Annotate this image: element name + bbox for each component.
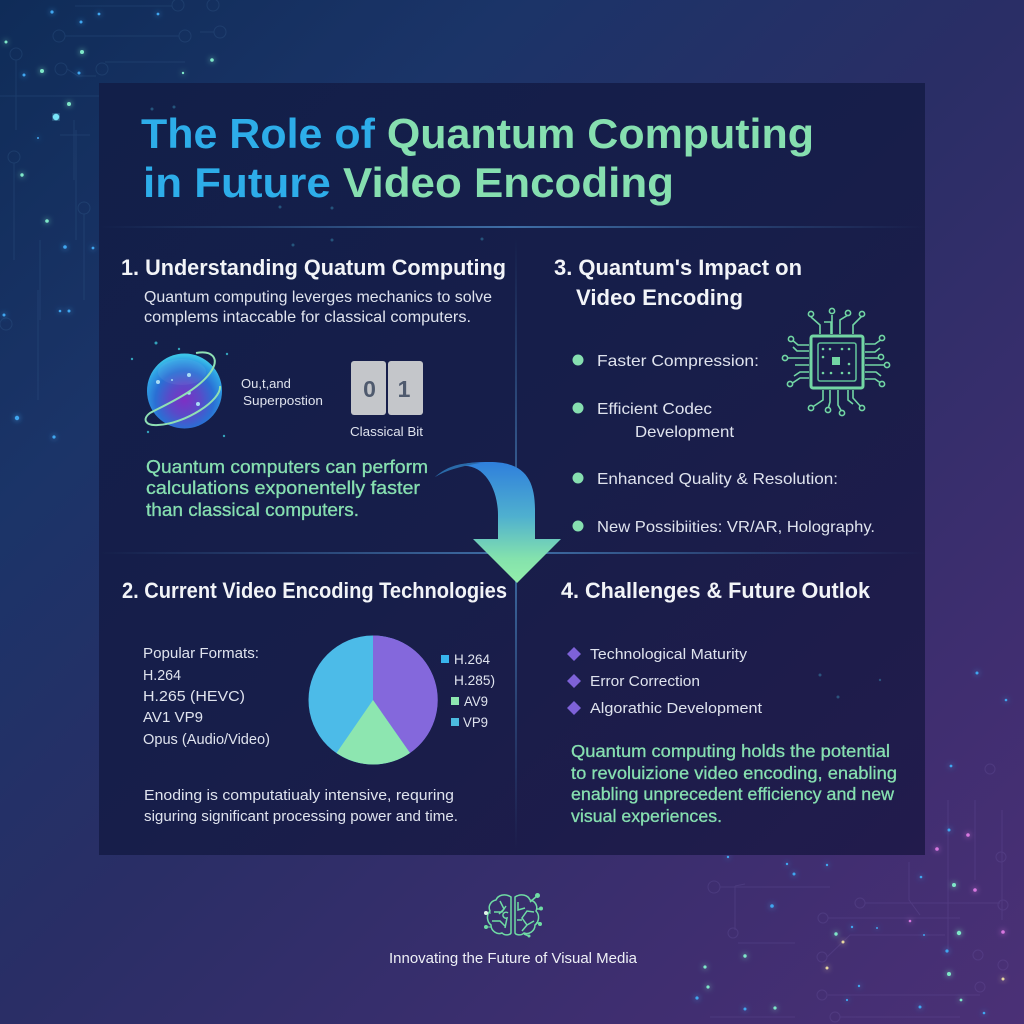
panel 1: understanding quantum computing bbox=[121, 255, 506, 520]
bullet: enhanced quality: Enhanced Quality & Resolution: bbox=[597, 471, 838, 488]
heading 3 bbox=[554, 255, 802, 310]
bullet: faster compression: Faster Compression: bbox=[597, 353, 759, 370]
icon: classical bit: 1 bbox=[398, 376, 411, 402]
label: qubit superposition bbox=[241, 376, 323, 408]
green callout 2: Quantum computing holds the potential bbox=[571, 741, 890, 761]
heading 2: 2. Current Video Encoding Technologies bbox=[122, 578, 507, 603]
item: algorithmic development: Algorathic Development bbox=[590, 700, 763, 717]
item: technological maturity: Technological Maturity bbox=[590, 646, 748, 663]
label: classical bit: Classical Bit bbox=[350, 424, 423, 439]
icon: quantum sphere bbox=[131, 342, 228, 437]
heading 4: 4. Challenges & Future Outlok bbox=[561, 578, 871, 603]
panel 2: current video encoding technologies bbox=[122, 578, 507, 825]
tagline: Innovating the Future of Visual Media bbox=[389, 951, 638, 967]
formats list: H.265 (HEVC) bbox=[143, 688, 245, 705]
formats list: AV1 VP9 bbox=[143, 709, 203, 726]
formats list bbox=[143, 645, 270, 748]
heading 3: 3. Quantum's Impact on bbox=[554, 255, 802, 280]
legend: H.285) bbox=[454, 672, 495, 688]
arrow: flow from panel 1 to panel 2 bbox=[435, 462, 561, 583]
green callout 1: than classical computers. bbox=[146, 500, 359, 520]
body text 1 bbox=[144, 289, 492, 326]
footer bbox=[389, 893, 638, 967]
green callout 2 bbox=[571, 741, 897, 826]
legend: AV9 bbox=[464, 693, 488, 709]
icon: classical bit: 0 bbox=[363, 376, 376, 402]
formats list: Opus (Audio/Video) bbox=[143, 731, 270, 748]
body text 2: Enoding is computatiualy intensive, requring bbox=[144, 787, 454, 804]
item: error correction: Error Correction bbox=[590, 673, 700, 690]
body text 2: siguring significant processing power and time. bbox=[144, 808, 458, 825]
panel 3: quantum's impact bbox=[554, 255, 890, 536]
icon: circuit brain bbox=[484, 893, 543, 938]
title: in Future Video Encoding bbox=[143, 159, 674, 206]
green callout 1: calculations exponentelly faster bbox=[146, 478, 420, 498]
green callout 2: visual experiences. bbox=[571, 806, 722, 826]
formats list: H.264 bbox=[143, 667, 181, 684]
green callout 1 bbox=[146, 457, 428, 520]
green callout 2: enabling unprecedent efficiency and new bbox=[571, 784, 894, 804]
green callout 2: to revoluizione video encoding, enabling bbox=[571, 763, 897, 783]
formats list: Popular Formats: bbox=[143, 645, 259, 662]
label: qubit superposition: Ou,t,and bbox=[241, 376, 291, 391]
bullet: efficient codec development: Development bbox=[635, 424, 735, 441]
main panel bbox=[99, 83, 925, 855]
bullet: new possibilities: New Possibiities: VR/AR, Holography. bbox=[597, 519, 875, 536]
icon: classical bit bbox=[351, 361, 423, 415]
bullet: efficient codec development bbox=[572, 401, 735, 441]
bullet list bbox=[572, 353, 875, 536]
body text 1: Quantum computing leverges mechanics to solve bbox=[144, 289, 492, 306]
diamond list bbox=[567, 646, 763, 717]
body text 1: complems intaccable for classical computers. bbox=[144, 309, 471, 326]
label: qubit superposition: Superpostion bbox=[243, 393, 323, 408]
green callout 1: Quantum computers can perform bbox=[146, 457, 428, 477]
heading 1: 1. Understanding Quatum Computing bbox=[121, 255, 506, 280]
bullet: efficient codec development: Efficient Codec bbox=[597, 401, 712, 418]
heading 3: Video Encoding bbox=[576, 285, 743, 310]
legend bbox=[441, 651, 495, 730]
legend: H.264 bbox=[454, 651, 490, 667]
icon: microchip bbox=[782, 308, 890, 416]
pie chart bbox=[308, 635, 438, 764]
legend: VP9 bbox=[463, 714, 488, 730]
title: The Role of Quantum Computing bbox=[141, 110, 814, 157]
body text 2 bbox=[144, 787, 458, 825]
title bbox=[141, 110, 814, 206]
panel 4: challenges and future outlook bbox=[561, 578, 897, 826]
